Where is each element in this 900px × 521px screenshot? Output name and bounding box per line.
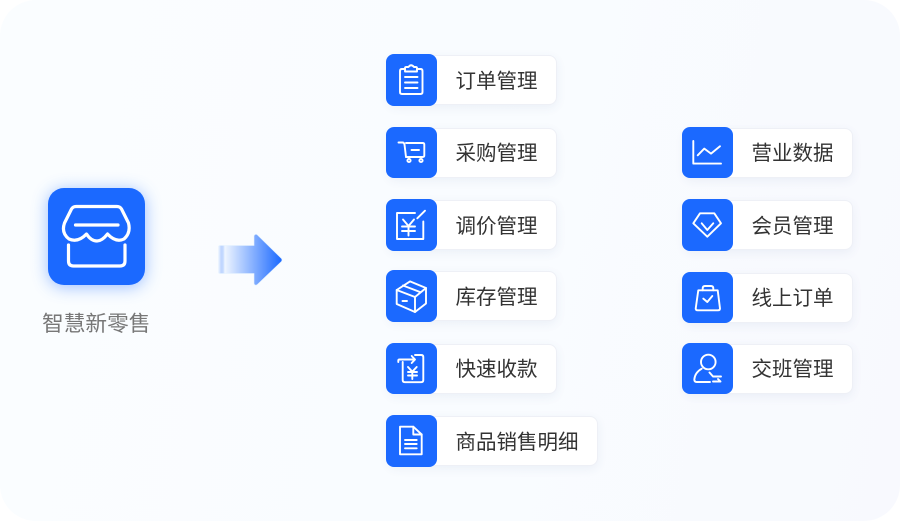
icon: shopping bag — [682, 272, 733, 323]
icon: box — [386, 270, 437, 322]
icon: price edit — [386, 199, 437, 250]
item: 线上订单: 线上订单 — [752, 287, 834, 310]
icon: line chart — [682, 127, 733, 178]
item: 订单管理 — [386, 54, 557, 106]
app icon: smart retail store — [48, 188, 145, 284]
item: 商品销售明细 — [386, 415, 598, 468]
item: 交班管理 — [682, 343, 853, 396]
item: 快速收款: 快速收款 — [456, 358, 538, 381]
item: 订单管理: 订单管理 — [456, 70, 538, 92]
item: 会员管理 — [682, 199, 853, 252]
icon: quick payment — [386, 342, 437, 394]
icon: diamond — [682, 199, 733, 250]
item: 库存管理 — [386, 270, 557, 322]
icon: clipboard — [386, 54, 437, 106]
item: 线上订单 — [682, 272, 853, 324]
icon: shift handover — [682, 343, 733, 394]
item: 营业数据: 营业数据 — [752, 142, 834, 165]
item: 采购管理 — [386, 127, 557, 180]
item: 营业数据 — [682, 127, 853, 180]
item: 调价管理 — [386, 199, 557, 252]
icon: shopping cart — [386, 127, 437, 178]
item: 商品销售明细: 商品销售明细 — [456, 430, 578, 454]
item: 交班管理: 交班管理 — [752, 358, 834, 381]
app name label: 智慧新零售 — [42, 311, 150, 336]
icon: document — [386, 415, 437, 466]
arrow — [218, 234, 282, 286]
item: 库存管理: 库存管理 — [456, 286, 538, 309]
item: 会员管理: 会员管理 — [752, 214, 834, 238]
item: 调价管理: 调价管理 — [456, 214, 538, 238]
item: 快速收款 — [386, 343, 557, 396]
item: 采购管理: 采购管理 — [456, 142, 538, 165]
